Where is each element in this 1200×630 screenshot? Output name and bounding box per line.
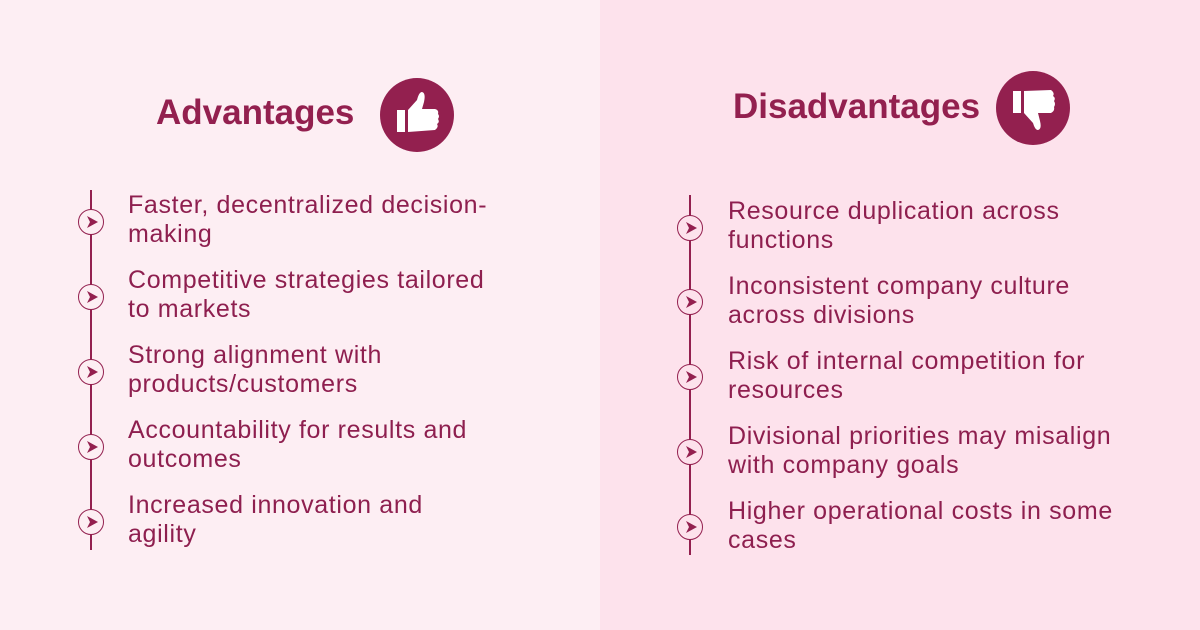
item 1: functions (728, 226, 834, 254)
item 3: products/customers (128, 370, 358, 398)
item 3: Strong alignment with (128, 341, 382, 369)
item 2: to markets (128, 295, 251, 323)
item 4: outcomes (128, 445, 242, 473)
item 3: resources (728, 376, 844, 404)
item 5 (728, 497, 1113, 554)
item 2: Competitive strategies tailored (128, 266, 484, 294)
title: advantages: Advantages (156, 93, 354, 132)
bullets (677, 215, 703, 540)
item 2: Inconsistent company culture (728, 272, 1070, 300)
item 5: Higher operational costs in some (728, 497, 1113, 525)
item 1: Faster, decentralized decision- (128, 191, 487, 219)
item 1: making (128, 220, 212, 248)
panel: advantages (0, 0, 600, 630)
item 3: Risk of internal competition for (728, 347, 1085, 375)
item 3 (128, 341, 382, 398)
item 5: Increased innovation and (128, 491, 423, 519)
timeline (90, 190, 92, 550)
title: disadvantages: Disadvantages (733, 87, 980, 126)
item 2 (728, 272, 1070, 329)
item 4 (128, 416, 467, 473)
item 2: across divisions (728, 301, 915, 329)
item 4: Divisional priorities may misalign (728, 422, 1111, 450)
item 5: cases (728, 526, 797, 554)
item 1 (728, 197, 1060, 254)
item 4: with company goals (728, 451, 959, 479)
bullets (78, 209, 104, 535)
icon: thumbs up (380, 78, 454, 152)
item 4: Accountability for results and (128, 416, 467, 444)
item 2 (128, 266, 484, 323)
icon: thumbs down (996, 71, 1070, 145)
item 1 (128, 191, 487, 248)
timeline (689, 195, 691, 555)
item 4 (728, 422, 1111, 479)
panel: disadvantages (600, 0, 1200, 630)
item 1: Resource duplication across (728, 197, 1060, 225)
item 5 (128, 491, 423, 548)
item 3 (728, 347, 1085, 404)
item 5: agility (128, 520, 196, 548)
